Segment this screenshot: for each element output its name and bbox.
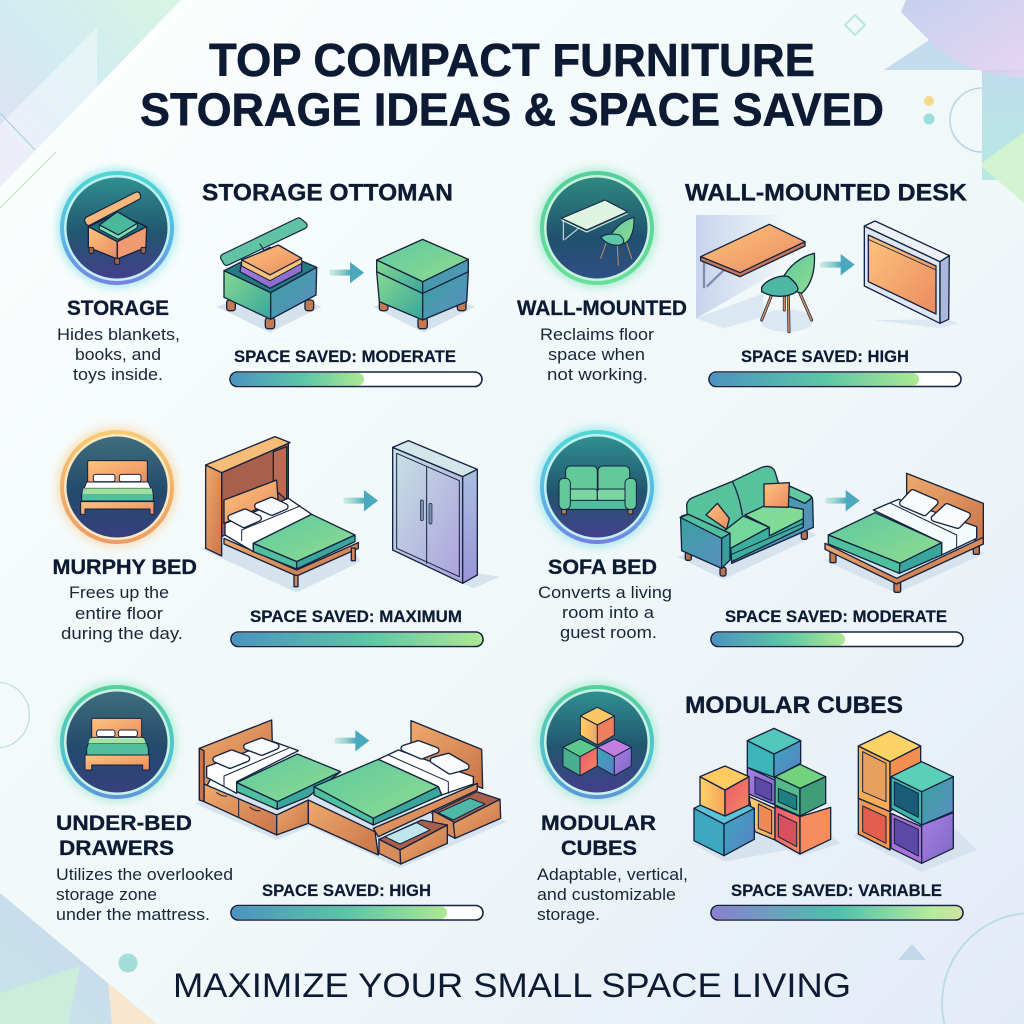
label: MURPHY BED — [52, 555, 197, 579]
arrow — [343, 490, 378, 511]
description: entire floor — [75, 604, 163, 623]
icon: bed badge orange — [58, 428, 176, 546]
heading: STORAGE OTTOMAN — [202, 180, 453, 206]
icon: sofa badge — [538, 428, 656, 546]
illustration: cube arrangements — [692, 728, 977, 872]
panel: sofa bed — [538, 428, 985, 646]
description: Converts a living — [538, 583, 672, 602]
description — [538, 583, 672, 642]
description: during the day. — [61, 624, 183, 643]
icon: desk badge — [538, 169, 656, 287]
metric label: SPACE SAVED: MODERATE — [234, 348, 456, 366]
illustration: ottoman open and closed — [217, 221, 475, 333]
label — [56, 811, 192, 860]
description: not working. — [547, 365, 648, 384]
description: guest room. — [560, 623, 657, 642]
label: CUBES — [561, 836, 637, 860]
metric label: SPACE SAVED: MODERATE — [725, 608, 947, 626]
description: storage. — [537, 905, 600, 924]
label — [541, 811, 656, 860]
description: toys inside. — [73, 365, 163, 384]
icon: ottoman badge — [58, 169, 176, 287]
progress bar: variable — [711, 906, 963, 920]
metric label: SPACE SAVED: HIGH — [262, 882, 431, 900]
label: DRAWERS — [59, 836, 174, 860]
illustration: desk and folded desk — [696, 215, 958, 332]
panel: modular cubes — [537, 683, 977, 924]
arrow — [825, 490, 860, 511]
description — [61, 583, 183, 643]
heading: WALL-MOUNTED DESK — [685, 180, 968, 206]
metric label: SPACE SAVED: VARIABLE — [731, 882, 942, 900]
label: STORAGE — [67, 296, 169, 320]
icon: cubes badge — [538, 683, 656, 801]
panel: wall-mounted desk — [517, 169, 968, 386]
description: Frees up the — [69, 583, 169, 602]
progress bar: maximum — [231, 632, 483, 646]
description: under the mattress. — [56, 905, 210, 924]
description: Adaptable, vertical, — [537, 865, 688, 884]
description — [56, 865, 233, 924]
metric label: SPACE SAVED: MAXIMUM — [250, 608, 462, 626]
arrow — [329, 262, 364, 283]
description: space when — [548, 345, 645, 364]
description: Utilizes the overlooked — [56, 865, 233, 884]
label: SOFA BED — [548, 555, 657, 579]
description — [57, 325, 180, 384]
title: STORAGE IDEAS & SPACE SAVED — [140, 84, 884, 136]
title — [140, 34, 884, 136]
metric label: SPACE SAVED: HIGH — [741, 348, 909, 366]
progress bar: moderate — [230, 372, 482, 386]
title: TOP COMPACT FURNITURE — [209, 34, 815, 86]
description: and customizable — [537, 885, 676, 904]
label: UNDER-BED — [56, 811, 192, 835]
description: Hides blankets, — [57, 325, 180, 344]
description — [540, 325, 654, 384]
description: room into a — [562, 603, 655, 622]
progress bar: high — [231, 906, 483, 920]
label: WALL-MOUNTED — [517, 296, 687, 320]
panel: murphy bed — [52, 428, 500, 646]
panel: storage ottoman — [57, 169, 482, 386]
label: MODULAR — [541, 811, 656, 835]
arrow — [335, 730, 369, 751]
progress bar: high — [709, 372, 961, 386]
panel: under-bed drawers — [56, 683, 507, 924]
description: storage zone — [56, 885, 157, 904]
description: Reclaims floor — [540, 325, 654, 344]
footer tagline: MAXIMIZE YOUR SMALL SPACE LIVING — [173, 967, 851, 1005]
description — [537, 865, 688, 924]
illustration: murphy bed and closed cabinet — [200, 437, 500, 593]
illustration: beds with drawers — [195, 720, 507, 868]
description: books, and — [75, 345, 161, 364]
arrow — [820, 254, 855, 275]
heading: MODULAR CUBES — [685, 692, 903, 719]
illustration: sofa and bed — [677, 466, 985, 593]
progress bar: moderate — [711, 632, 963, 646]
icon: bed badge green — [58, 683, 176, 801]
